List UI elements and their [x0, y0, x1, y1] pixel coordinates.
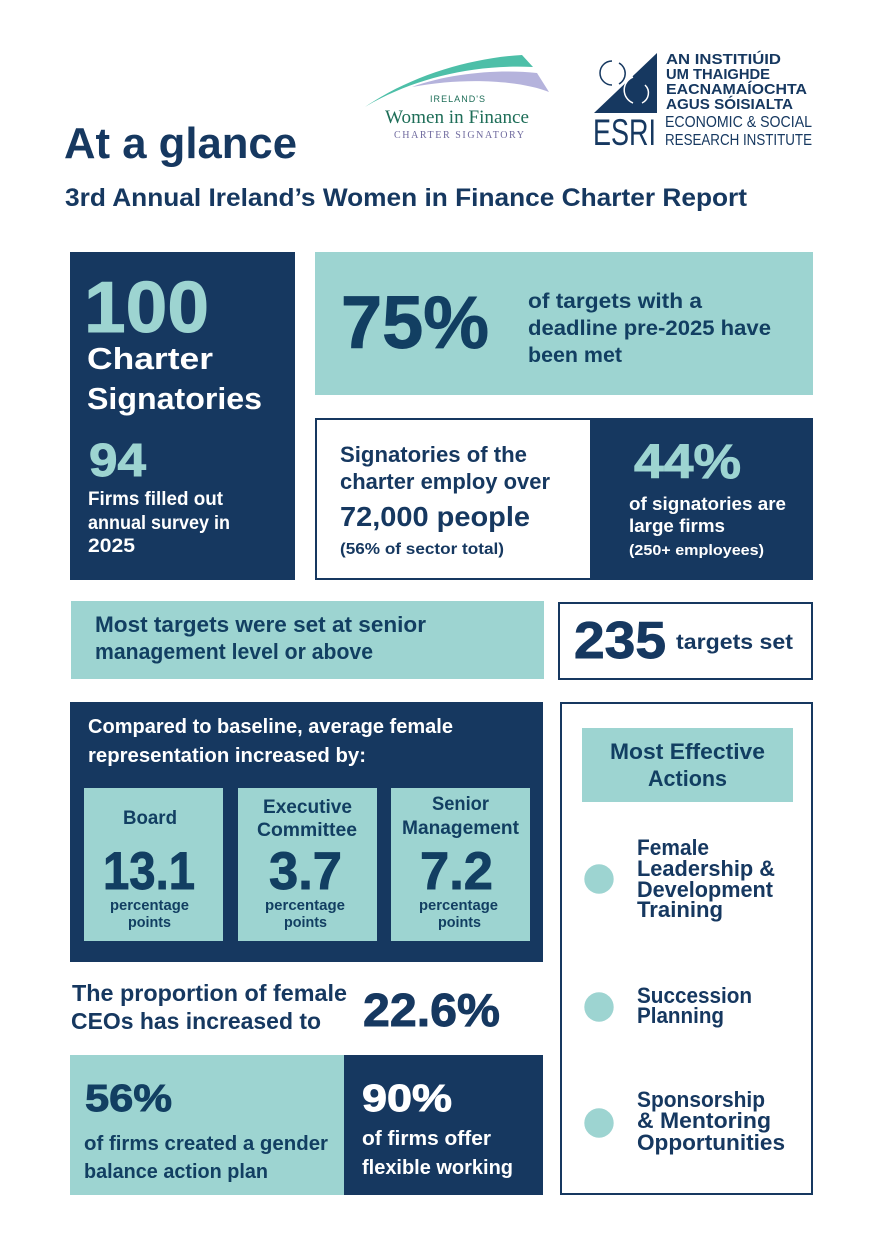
action: female leadership — [584, 835, 775, 922]
card: senior management: 7.2 — [420, 842, 493, 901]
logo: ESRI: RESEARCH INSTITUTE — [665, 132, 812, 149]
panel: female representation: representation increased by: — [88, 745, 366, 767]
panel: employment: Signatories of the — [340, 442, 527, 467]
logo: ESRI: UM THAIGHDE — [666, 66, 770, 83]
text block: female CEOs: CEOs has increased to — [71, 1008, 321, 1034]
panel: 75% of targets met: deadline pre-2025 have — [528, 317, 771, 340]
card: board — [84, 788, 223, 941]
action: female leadership: Leadership & — [637, 856, 775, 881]
panel: employment — [316, 419, 591, 579]
logo: Women in Finance charter signatory: Women in Finance — [385, 107, 529, 128]
panel: 235 targets set: targets set — [676, 631, 793, 654]
panel: charter signatories: 94 — [89, 434, 146, 486]
panel: 75% of targets met: of targets with a — [528, 290, 702, 313]
panel: large firms — [590, 418, 813, 580]
logo: ESRI: AGUS SÓISIALTA — [666, 95, 793, 113]
panel: gender balance action plan: balance action plan — [84, 1161, 268, 1183]
panel: charter signatories: Signatories — [87, 381, 262, 416]
panel: flexible working — [344, 1055, 543, 1195]
panel: charter signatories: Charter — [87, 341, 213, 376]
card: board: points — [128, 914, 171, 931]
action: succession planning: Planning — [637, 1003, 724, 1028]
panel: gender balance action plan: 56% — [85, 1078, 172, 1120]
action: sponsorship and mentoring — [584, 1087, 785, 1155]
panel: female representation: Compared to baseline, average female — [88, 716, 453, 738]
panel: senior management targets: management level or above — [95, 639, 373, 664]
panel: 235 targets set — [559, 603, 812, 679]
panel: charter signatories: annual survey in — [88, 513, 230, 534]
panel: gender balance action plan: of firms created a gender — [84, 1133, 328, 1155]
logo: Women in Finance charter signatory: CHARTER SIGNATORY — [394, 130, 524, 141]
action: sponsorship and mentoring: Opportunities — [637, 1130, 785, 1155]
action: sponsorship and mentoring: & Mentoring — [637, 1108, 771, 1133]
card: executive committee: Committee — [257, 820, 357, 841]
text block: female CEOs: 22.6% — [363, 984, 500, 1036]
card: senior management: percentage — [419, 897, 498, 914]
card: executive committee: 3.7 — [269, 842, 342, 901]
card: executive committee: percentage — [265, 897, 345, 914]
logo: Women in Finance charter signatory: IRELAND'S — [430, 94, 485, 104]
panel: flexible working: of firms offer — [362, 1128, 491, 1150]
panel: large firms: 44% — [634, 436, 741, 489]
card: executive committee: Executive — [263, 797, 352, 818]
text block: female CEOs — [71, 980, 500, 1036]
panel: 75% of targets met — [315, 252, 813, 395]
action: female leadership: Training — [637, 897, 723, 922]
action: succession planning — [584, 983, 752, 1028]
panel: flexible working: 90% — [362, 1078, 452, 1120]
panel: 75% of targets met: been met — [528, 344, 622, 367]
card: senior management: Management — [402, 818, 520, 839]
panel: senior management targets: Most targets were set at senior — [95, 612, 426, 637]
action: female leadership: Female — [637, 835, 709, 860]
title: At a glance — [64, 119, 297, 168]
logo: ESRI: EACNAMAÍOCHTA — [666, 81, 807, 98]
card: senior management — [391, 788, 530, 941]
logo: ESRI: ESRI — [593, 112, 656, 153]
panel: employment: charter employ over — [340, 469, 550, 494]
panel: 75% of targets met: 75% — [341, 281, 489, 364]
panel: large firms: (250+ employees) — [629, 542, 764, 559]
panel: charter signatories: 100 — [84, 268, 209, 348]
action: succession planning: Succession — [637, 983, 752, 1008]
action: female leadership: Development — [637, 877, 774, 902]
action: sponsorship and mentoring: Sponsorship — [637, 1087, 765, 1112]
subtitle: 3rd Annual Ireland’s Women in Finance Charter Report — [65, 184, 748, 212]
panel: large firms: large firms — [629, 516, 725, 536]
card: senior management: Senior — [432, 794, 490, 815]
heading: most effective actions: Most Effective — [610, 739, 765, 764]
logo: ESRI: ECONOMIC & SOCIAL — [665, 114, 812, 131]
panel: flexible working: flexible working — [362, 1157, 513, 1179]
panel: gender balance action plan — [70, 1055, 344, 1195]
logo: Women in Finance charter signatory — [365, 55, 549, 141]
text block: female CEOs: The proportion of female — [72, 980, 347, 1006]
panel: employment: (56% of sector total) — [340, 541, 504, 558]
card: board: percentage — [110, 897, 189, 914]
panel: large firms: of signatories are — [629, 494, 786, 514]
card: executive committee — [238, 788, 377, 941]
panel: senior management targets — [71, 601, 544, 679]
panel: charter signatories — [70, 252, 295, 580]
heading: most effective actions: Actions — [648, 766, 727, 791]
logo: ESRI — [593, 50, 812, 153]
heading: most effective actions — [582, 728, 793, 802]
logo: ESRI: AN INSTITIÚID — [666, 50, 781, 68]
card: board: Board — [123, 808, 177, 829]
panel: female representation — [70, 702, 543, 962]
card: senior management: points — [438, 914, 481, 931]
card: executive committee: points — [284, 914, 327, 931]
panel: 235 targets set: 235 — [574, 612, 666, 670]
panel: charter signatories: Firms filled out — [88, 489, 224, 510]
panel: most effective actions — [561, 703, 812, 1194]
panel: charter signatories: 2025 — [88, 536, 135, 557]
panel: employment: 72,000 people — [340, 501, 530, 532]
card: board: 13.1 — [103, 842, 195, 901]
